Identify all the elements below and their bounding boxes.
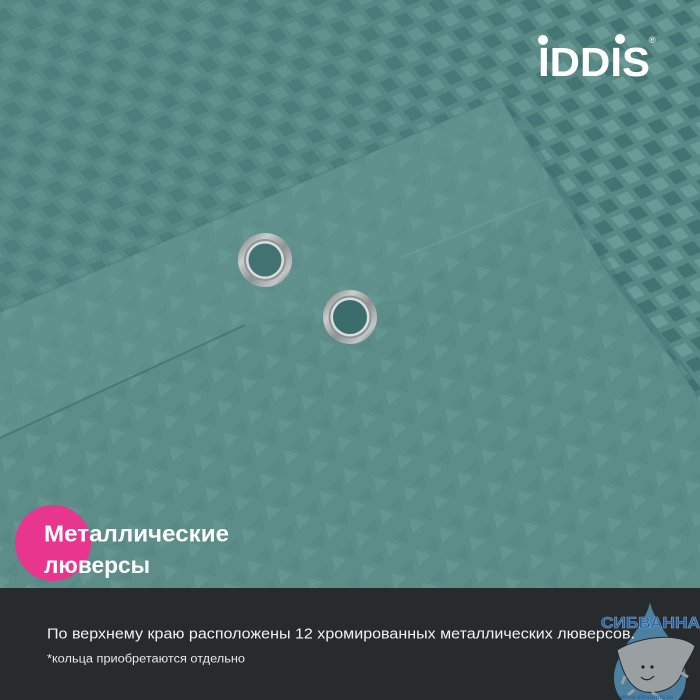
footnote: *кольца приобретаются отдельно	[47, 654, 245, 666]
icon: metal eyelet left	[238, 233, 292, 287]
heading: Металлические	[44, 520, 229, 546]
hem line	[0, 325, 245, 438]
logo: IDDIS: IDDIS	[538, 39, 650, 85]
heading	[44, 520, 229, 578]
panel: dark footer	[0, 588, 700, 700]
heading: люверсы	[44, 552, 150, 578]
inner fold line	[400, 197, 550, 258]
panel: folded fabric layer	[0, 97, 700, 590]
pink accent circle	[15, 505, 91, 581]
fold shadow	[503, 97, 700, 396]
logo: IDDIS: ®	[649, 35, 656, 45]
upper fold lighter tone	[0, 97, 550, 438]
top edge shadow	[0, 97, 500, 312]
back fabric softer weave toward the left	[0, 0, 620, 330]
watermark: СИБВАННА: СИБВАННА	[601, 615, 700, 632]
watermark: СИБВАННА	[601, 602, 700, 700]
body text: По верхнему краю расположены 12 хромированных металлических люверсов.	[47, 626, 635, 642]
icon: metal eyelet right	[323, 290, 377, 344]
